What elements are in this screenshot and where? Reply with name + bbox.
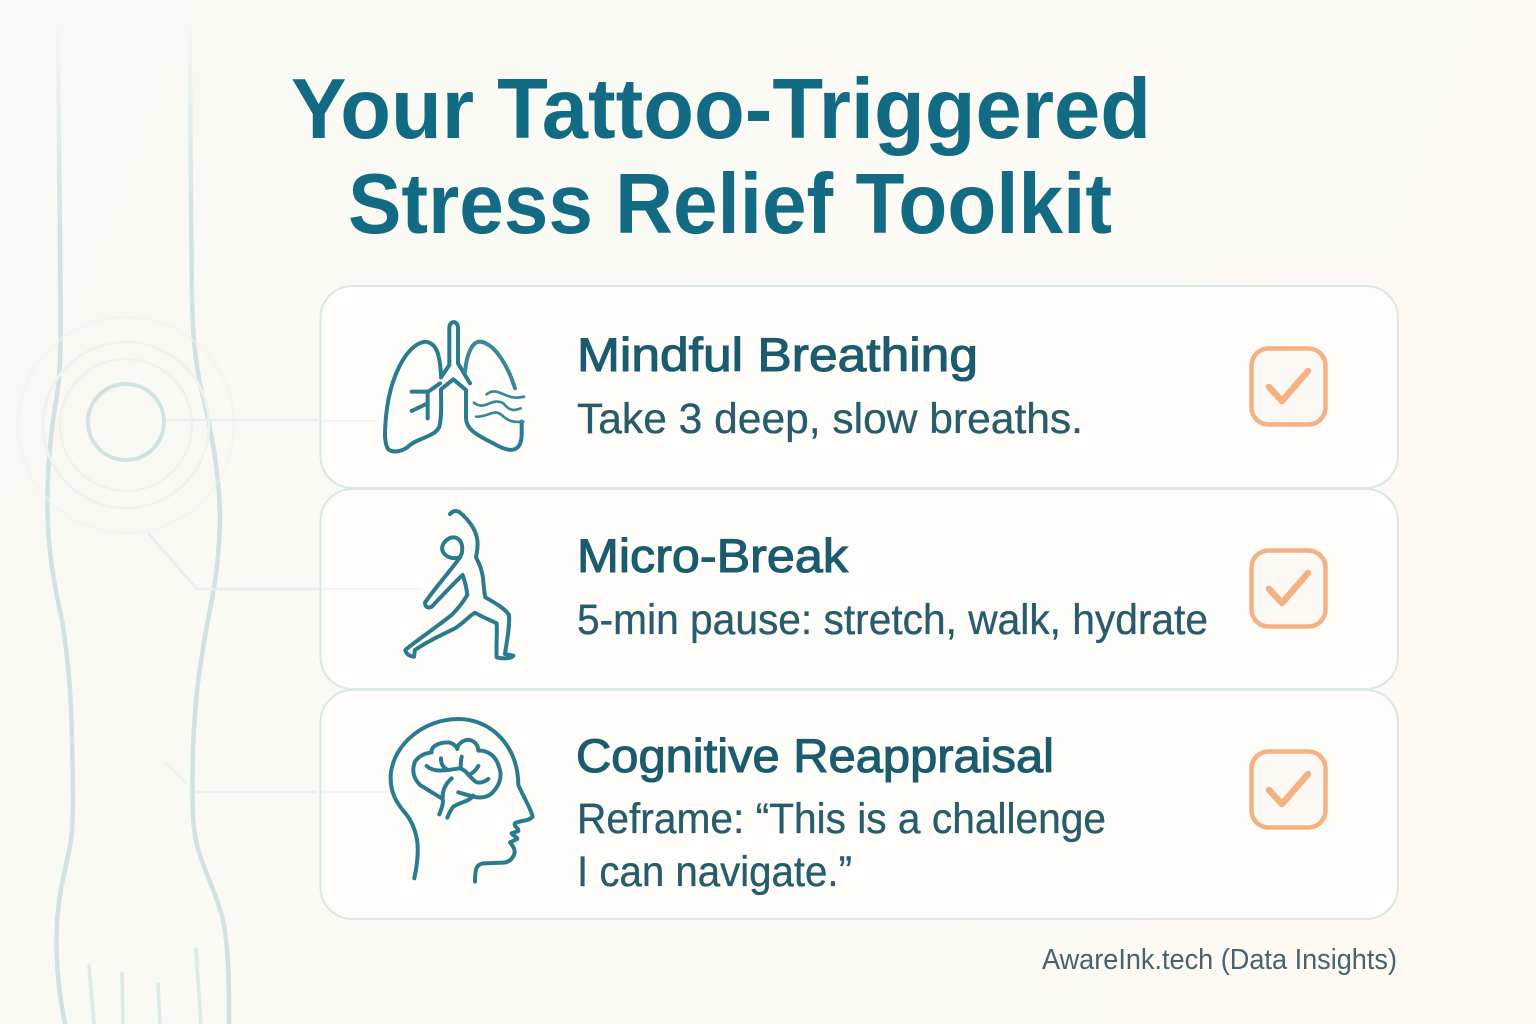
icon: checkbox — [1252, 752, 1326, 828]
text: reframe statement: I can navigate.” — [577, 848, 852, 896]
icon: stretching figure — [405, 511, 513, 658]
faint ripple rings — [18, 317, 234, 533]
panel: cognitive reappraisal — [320, 690, 1398, 919]
finger lines — [89, 949, 201, 1024]
heading: cognitive reappraisal: Cognitive Reappraisal — [576, 729, 1054, 782]
panel: mindful breathing — [320, 286, 1398, 488]
text: take 3 deep breaths: Take 3 deep, slow breaths. — [577, 395, 1083, 443]
text: reframe statement: Reframe: “This is a challenge — [577, 795, 1106, 843]
heading: micro-break: Micro-Break — [577, 529, 849, 582]
title: Your Tattoo-Triggered — [291, 62, 1151, 157]
text: reframe statement — [577, 795, 1106, 896]
source credit: AwareInk.tech (Data Insights) — [1042, 944, 1397, 976]
icon: checkbox — [1252, 550, 1326, 626]
text: 5-min pause: 5-min pause: stretch, walk, hydrate — [577, 596, 1208, 644]
background arm illustration — [18, 30, 234, 1024]
title — [291, 62, 1151, 252]
icon: head with brain — [391, 719, 533, 882]
heading: mindful breathing: Mindful Breathing — [577, 328, 978, 381]
icon: checkbox — [1252, 348, 1326, 424]
icon: lungs — [385, 322, 524, 451]
title: Stress Relief Toolkit — [348, 157, 1112, 252]
connector lines from arm to cards — [148, 420, 322, 792]
wrist bump marker ring — [88, 384, 164, 460]
panel: micro-break — [320, 489, 1398, 689]
